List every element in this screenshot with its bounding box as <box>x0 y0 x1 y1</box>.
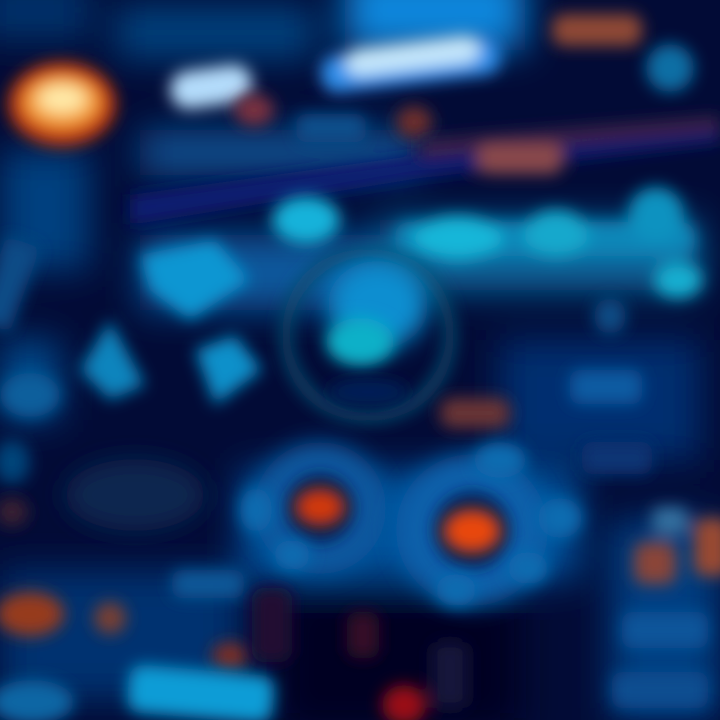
lower-left accents <box>0 498 248 670</box>
teal top-right blob <box>646 44 694 92</box>
glowing orange orb <box>8 62 116 146</box>
bottom-left bars <box>0 664 276 720</box>
pale blue pill small <box>168 62 254 111</box>
right lower accents <box>612 507 720 708</box>
orange top-right bar <box>552 14 642 46</box>
gear right <box>396 454 548 606</box>
gear cluster <box>240 442 582 606</box>
small red accents <box>234 94 432 138</box>
pale blue pill large <box>319 34 502 95</box>
dark lower-left panel <box>65 459 205 531</box>
right mid panels <box>440 370 652 474</box>
left mid blobs <box>0 236 262 484</box>
bottom dark columns <box>252 588 468 720</box>
diagonal band <box>130 114 720 225</box>
cyan blobs middle <box>140 187 702 334</box>
gear left <box>254 442 386 574</box>
circular globe emblem <box>286 253 450 417</box>
gear teeth <box>240 442 582 606</box>
top highlights <box>8 14 694 146</box>
